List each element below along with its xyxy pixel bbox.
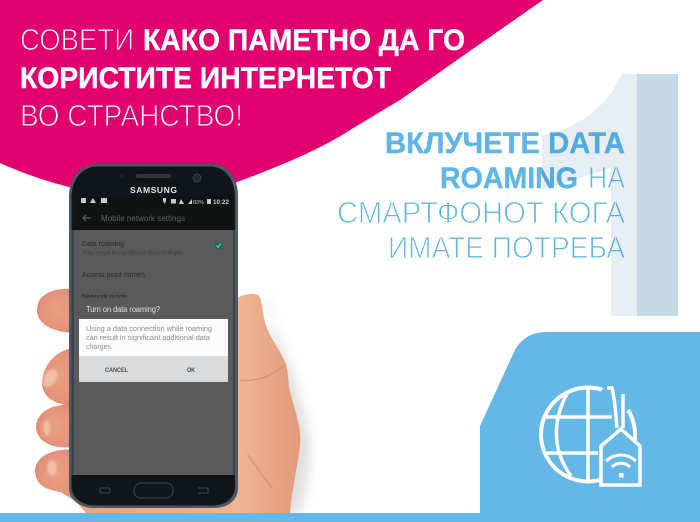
settings list: May result in significant data charges [82, 250, 183, 256]
fingers [35, 289, 76, 501]
finger four [35, 450, 76, 501]
earpiece and camera [120, 174, 201, 182]
icon: globe with wifi price tag [541, 388, 640, 485]
tip text: ROAMING [440, 162, 578, 195]
title: КОРИСТИТЕ ИНТЕРНЕТОТ [20, 62, 391, 95]
finger three [36, 405, 74, 447]
status bar [81, 198, 230, 206]
settings list: Access point names [82, 272, 145, 279]
dialog: charges [86, 344, 111, 351]
hand holding phone [35, 289, 310, 513]
title [20, 22, 465, 133]
blue corner panel [480, 332, 700, 522]
magenta header background [0, 0, 543, 197]
phone body [69, 164, 238, 508]
status bar: 83% [193, 200, 204, 206]
bottom blue strip [0, 513, 700, 522]
settings list: Network mode [82, 294, 127, 301]
smartphone [69, 164, 238, 508]
settings list [82, 241, 222, 301]
fingernails [39, 366, 61, 476]
tip text: СМАРТФОНОТ КОГА [337, 195, 625, 230]
status and app bar [74, 196, 233, 230]
dialog: OK [187, 368, 196, 374]
dialog: Turn on data roaming? [86, 305, 161, 314]
hand shadow [262, 300, 310, 513]
status bar: 10:22 [213, 200, 230, 206]
brand name: SAMSUNG [130, 185, 177, 195]
palm and thumb [66, 294, 300, 513]
home and navigation buttons [100, 483, 208, 498]
title: СОВЕТИ [20, 22, 134, 57]
screen [74, 196, 233, 475]
app bar title: Mobile network settings [101, 214, 185, 223]
title: ВО СТРАНСТВО! [20, 98, 243, 133]
finger one [37, 289, 74, 333]
title: КАКО ПАМЕТНО ДА ГО [143, 24, 465, 57]
dialog [74, 298, 233, 382]
finger two [42, 348, 74, 405]
large numeral 1 [542, 74, 678, 316]
settings list: Data roaming [82, 241, 124, 248]
tip text [337, 127, 625, 265]
dialog: can result in significant additional data [86, 335, 210, 342]
palm crease lines [240, 364, 286, 488]
dialog: CANCEL [105, 368, 128, 374]
tip text: НА [588, 160, 625, 195]
tip text: ВКЛУЧЕТЕ DATA [385, 127, 625, 160]
tip text: ИМАТЕ ПОТРЕБА [388, 230, 625, 265]
dialog: Using a data connection while roaming [86, 326, 212, 333]
